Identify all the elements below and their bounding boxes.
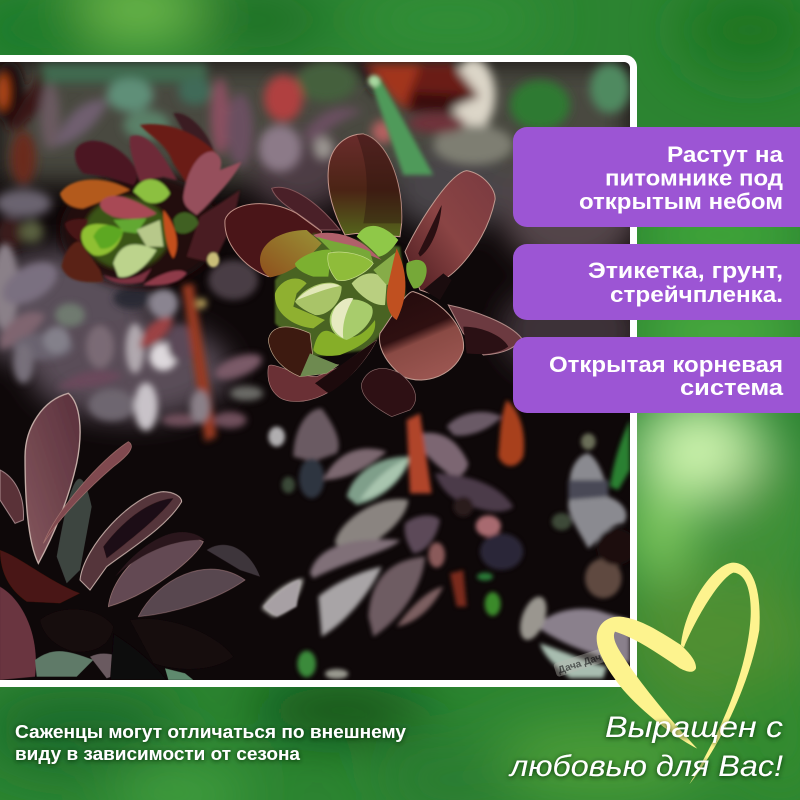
panel: grown outdoors: питомнике под bbox=[605, 166, 783, 190]
watermark: Дача Дач bbox=[557, 652, 603, 676]
photo background: blurred mid tones bbox=[0, 62, 640, 420]
panel: grown outdoors: открытым небом bbox=[579, 189, 783, 214]
photo top right: blurred plants and grass blade bbox=[258, 58, 630, 172]
slogan text: Выращен с bbox=[605, 711, 783, 744]
main flower bbox=[225, 134, 522, 417]
disclaimer text bbox=[15, 722, 406, 764]
panel: grown outdoors bbox=[513, 127, 800, 227]
photo middle left: mauve and white leaves bbox=[0, 243, 265, 442]
panel: grown outdoors: Растут на bbox=[667, 142, 784, 167]
photo frame with plant photograph bbox=[0, 55, 640, 687]
disclaimer text: Саженцы могут отличаться по внешнему bbox=[15, 722, 406, 742]
panel: open root system bbox=[513, 337, 800, 413]
icon: yellow heart bbox=[597, 563, 760, 784]
panel: label, soil, stretch film bbox=[513, 244, 800, 320]
panel: label, soil, stretch film: Этикетка, грунт, bbox=[588, 258, 783, 283]
slogan text bbox=[508, 711, 784, 783]
flower cluster left bbox=[60, 113, 242, 287]
photo lower right: variegated leaves bbox=[262, 400, 637, 679]
panel: open root system: система bbox=[680, 375, 784, 400]
panel: open root system: Открытая корневая bbox=[549, 352, 783, 377]
disclaimer text: виду в зависимости от сезона bbox=[15, 744, 301, 764]
photo top left: blurred leaves bbox=[0, 62, 253, 250]
panel: label, soil, stretch film: стрейчпленка. bbox=[610, 282, 783, 307]
lower left leaves bbox=[0, 393, 300, 680]
slogan text: любовью для Вас! bbox=[508, 750, 784, 783]
photo grass blade bbox=[368, 75, 433, 175]
